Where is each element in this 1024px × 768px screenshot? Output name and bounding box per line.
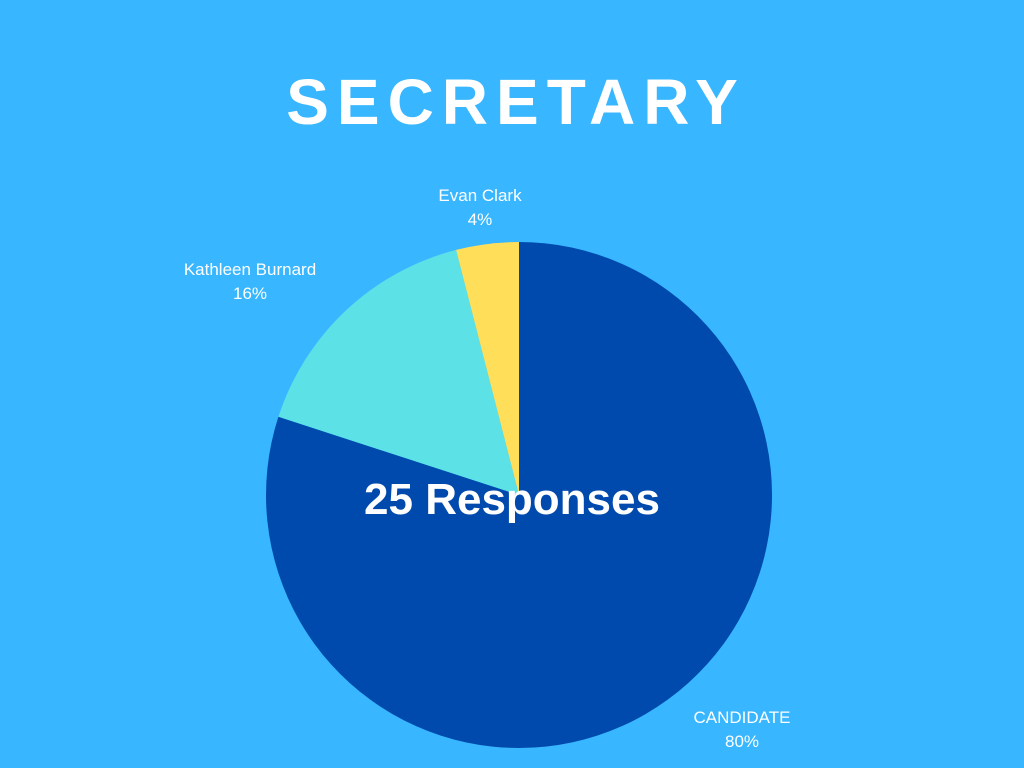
label: Kathleen Burnard: Kathleen Burnard [184,260,316,279]
label: CANDIDATE [694,708,790,751]
title: SECRETARY [286,66,746,138]
label: Kathleen Burnard [184,260,316,303]
slice: Evan Clark 4% [456,242,519,495]
label: Evan Clark: Evan Clark [438,186,522,205]
center text: 25 Responses [364,475,660,524]
slice: Kathleen Burnard 16% [278,250,519,495]
label: Evan Clark [438,186,522,229]
label: Kathleen Burnard: 16% [233,284,267,303]
label: Evan Clark: 4% [468,210,492,229]
label: CANDIDATE: CANDIDATE [694,708,790,727]
label: CANDIDATE: 80% [725,732,759,751]
slice: CANDIDATE 80% [266,242,772,748]
